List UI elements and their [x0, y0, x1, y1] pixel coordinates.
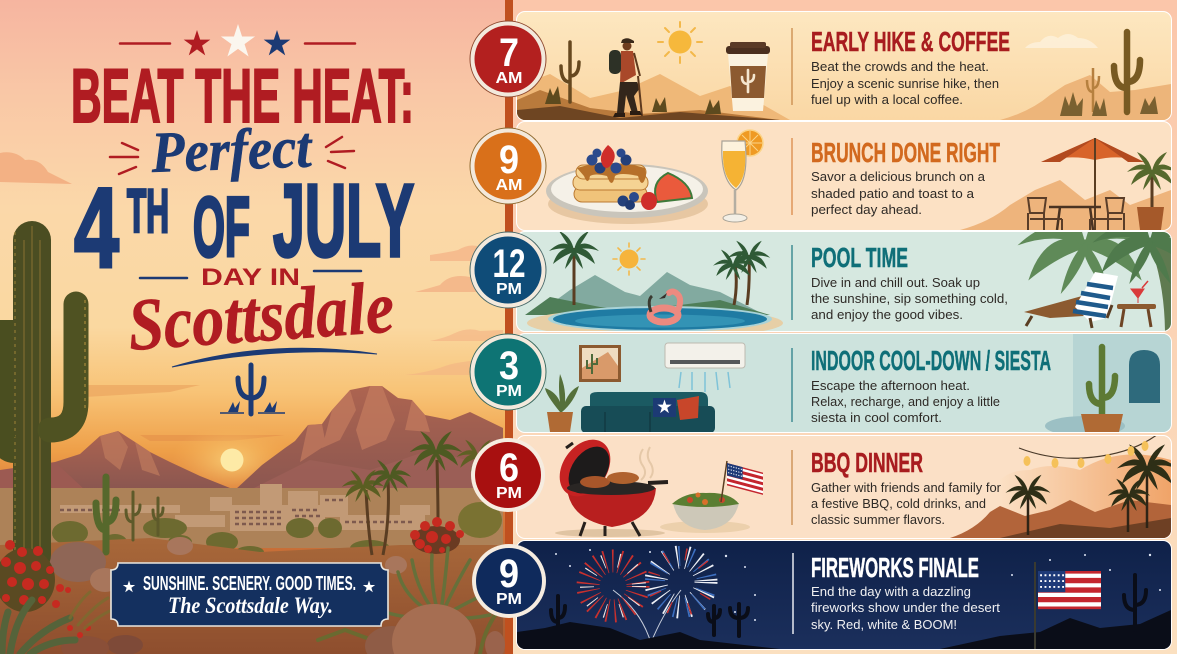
- badge: 6 pm: 6: [499, 446, 519, 490]
- description: Escape the afternoon heat.: [811, 379, 970, 393]
- description: sky. Red, white & BOOM!: [811, 618, 957, 632]
- title: perfect: Perfect: [149, 114, 314, 185]
- icon: beach lounger: [1024, 272, 1118, 328]
- card: indoor cool-down: [516, 333, 1172, 436]
- divider: [792, 553, 794, 634]
- big saguaro cactus: [0, 226, 85, 555]
- badge: 7 am: AM: [496, 70, 522, 87]
- icon: salad bowl: [660, 492, 750, 533]
- icon: american flag: [1035, 562, 1101, 650]
- icon: sun: [658, 22, 702, 63]
- badge: 9 pm: 9: [499, 552, 519, 596]
- title: day in: DAY IN: [201, 264, 300, 291]
- banner: tagline: [111, 563, 388, 626]
- badge: 9 am: AM: [496, 177, 522, 194]
- sun: [172, 424, 292, 496]
- description: Enjoy a scenic sunrise hike, then: [811, 77, 999, 91]
- description: fuel up with a local coffee.: [811, 93, 963, 107]
- title: 4th of july: TH: [127, 177, 169, 245]
- desert silhouette: [517, 610, 1171, 649]
- card: early hike and coffee: [516, 11, 1172, 121]
- description: [811, 585, 1001, 632]
- title: 4th of july: [74, 163, 414, 292]
- description: Dive in and chill out. Soak up: [811, 276, 980, 290]
- illustration: sunset scene: [950, 444, 1177, 538]
- icon: potted plant: [545, 374, 579, 432]
- illustration: desert hike: [517, 42, 790, 120]
- title: beat the heat: BEAT THE HEAT:: [71, 54, 414, 139]
- icon: flamingo float: [649, 292, 680, 322]
- title: 4th of july: OF: [193, 180, 250, 274]
- divider: [791, 348, 793, 422]
- badge: 3 pm: [470, 334, 546, 410]
- badge: 7 am: [470, 21, 546, 97]
- town: [0, 484, 503, 558]
- icon: brunch plate: [546, 145, 708, 224]
- rocks: [50, 537, 407, 654]
- stars: [555, 549, 1161, 621]
- icon: swimming pool: [527, 306, 783, 331]
- agave plants: [2, 548, 503, 654]
- desert ground: [0, 538, 503, 654]
- card: brunch: [516, 121, 1177, 231]
- illustration: wall and window: [1045, 334, 1171, 436]
- badge: 12 pm: [470, 232, 546, 308]
- accent ticks: [110, 137, 354, 174]
- icon: coffee cup: [726, 42, 770, 111]
- timeline bar: [505, 0, 513, 654]
- description: [811, 276, 1008, 322]
- heading: POOL TIME: [811, 242, 908, 273]
- description: [811, 481, 1001, 527]
- banner: tagline: SUNSHINE. SCENERY. GOOD TIMES.: [143, 573, 356, 595]
- badge: 9 am: 9: [499, 138, 519, 182]
- icon: framed picture: [579, 345, 621, 382]
- stars ornament: [120, 24, 355, 57]
- badge: 6 pm: [471, 438, 545, 512]
- description: Savor a delicious brunch on a: [811, 170, 985, 184]
- palm trees: [342, 431, 499, 555]
- icon: sun: [613, 243, 645, 275]
- description: perfect day ahead.: [811, 203, 922, 217]
- icon: sofa: [581, 392, 715, 433]
- illustration: mountains and palms: [525, 231, 770, 315]
- banner: tagline: The Scottsdale Way.: [168, 593, 333, 618]
- title: day in: [140, 264, 361, 291]
- icon: air conditioner: [665, 343, 745, 392]
- illustration: patio: [960, 138, 1177, 230]
- icon: mimosa glass: [722, 130, 763, 222]
- badge: 9 pm: PM: [496, 591, 522, 608]
- description: classic summer flavors.: [811, 513, 945, 527]
- card: bbq dinner: [516, 430, 1177, 539]
- description: shaded patio and toast to a: [811, 187, 974, 201]
- icon: small american flag: [721, 461, 763, 502]
- heading: FIREWORKS FINALE: [811, 552, 979, 583]
- icon: grill: [555, 440, 668, 537]
- divider: [791, 245, 793, 320]
- illustration: palm leaves: [1018, 232, 1171, 331]
- divider: [791, 138, 793, 215]
- title: scottsdale: Scottsdale: [125, 267, 397, 367]
- badge: 3 pm: PM: [496, 383, 522, 400]
- badge: 3 pm: 3: [499, 344, 519, 388]
- heading: BRUNCH DONE RIGHT: [811, 137, 1000, 168]
- badge: 12 pm: PM: [496, 281, 522, 298]
- mountains: [0, 386, 503, 500]
- description: [811, 170, 985, 217]
- title: 4th of july: 4: [74, 165, 119, 292]
- heading: BBQ DINNER: [811, 447, 923, 478]
- icon: fireworks: [587, 554, 709, 640]
- icon: hiker: [609, 38, 642, 117]
- small saguaro cacti: [96, 477, 163, 552]
- description: [811, 379, 1000, 425]
- card: pool time: [516, 231, 1172, 332]
- badge: 6 pm: PM: [496, 485, 522, 502]
- title: 4th of july: JULY: [273, 163, 414, 278]
- card: fireworks finale: [516, 540, 1172, 650]
- description: and enjoy the good vibes.: [811, 308, 963, 322]
- illustration: right desert: [1000, 32, 1171, 120]
- description: [811, 60, 999, 107]
- description: Gather with friends and family for: [811, 481, 1001, 495]
- underline swoosh: [172, 348, 377, 367]
- icon: string lights: [1019, 434, 1158, 468]
- divider: [791, 28, 793, 105]
- heading: EARLY HIKE & COFFEE: [811, 26, 1010, 57]
- foreground rocks: [365, 604, 505, 654]
- badge: 9 pm: [472, 544, 546, 618]
- description: the sunshine, sip something cold,: [811, 292, 1008, 306]
- right panel background: [513, 0, 1177, 654]
- silhouette cacti: [551, 575, 1146, 640]
- panel: poster left: [0, 24, 505, 654]
- icon: cactus: [220, 365, 285, 414]
- description: End the day with a dazzling: [811, 585, 971, 599]
- red flowers: [0, 517, 464, 638]
- divider: [791, 450, 793, 525]
- description: Beat the crowds and the heat.: [811, 60, 989, 74]
- badge: 7 am: 7: [499, 31, 519, 75]
- description: a festive BBQ, cold drinks, and: [811, 497, 986, 511]
- icon: side table and drink: [1117, 281, 1156, 327]
- icon: potted cactus: [1081, 347, 1123, 432]
- description: Relax, recharge, and enjoy a little: [811, 395, 1000, 409]
- description: fireworks show under the desert: [811, 601, 1001, 615]
- badge: 12 pm: 12: [492, 242, 526, 286]
- description: siesta in cool comfort.: [811, 411, 942, 425]
- clouds: [0, 152, 503, 441]
- badge: 9 am: [470, 128, 546, 204]
